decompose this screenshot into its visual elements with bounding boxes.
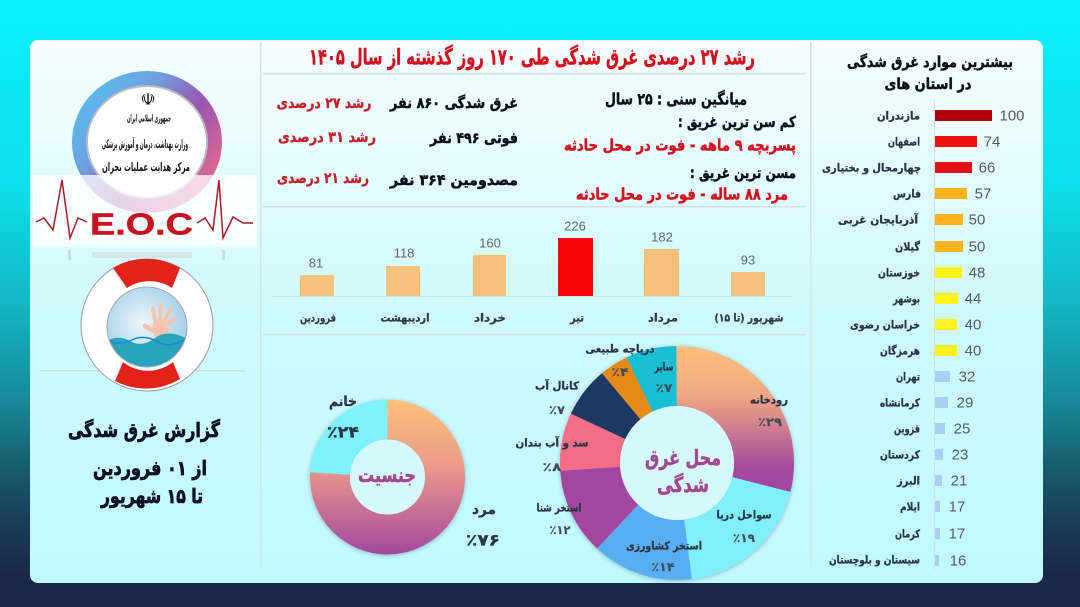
counts and growth: فوتی ۴۹۶ نفر (429, 129, 518, 147)
label: location centre: محل غرق (645, 446, 721, 470)
months (300, 312, 784, 324)
slice labels: استخر شنا (536, 502, 582, 514)
label: female (327, 394, 359, 442)
label: female: خانم (329, 394, 357, 410)
values: 182 (651, 230, 673, 244)
logo: ministry ring: مرکز هدایت عملیات بحران (102, 160, 190, 174)
label: male: مرد (472, 502, 496, 518)
province names: کرمانشاه (880, 396, 920, 410)
months: مرداد (648, 312, 678, 324)
slice labels: ٪۱۲ (550, 523, 571, 537)
province values: 25 (954, 420, 970, 438)
province names: هرمزگان (880, 344, 920, 358)
label: location centre: شدگی (657, 472, 709, 497)
province names: کردستان (880, 448, 920, 462)
province values: 40 (965, 316, 981, 334)
province values: 21 (951, 472, 967, 490)
slice labels: استخر کشاورزی (626, 540, 702, 552)
panel: provinces (822, 53, 1025, 570)
months: خرداد (474, 312, 506, 324)
age facts (564, 90, 796, 204)
logo: ministry ring: جمهوری اسلامی ایران (127, 114, 171, 124)
label: male: ٪۷۶ (466, 530, 500, 550)
bar chart: provinces (935, 110, 992, 566)
report title (68, 418, 220, 508)
label: male (466, 502, 500, 550)
values: 93 (741, 252, 755, 268)
province values: 74 (984, 134, 1000, 150)
values: 160 (479, 236, 501, 250)
values (309, 218, 755, 270)
heading: provinces: بیشترین موارد غرق شدگی (847, 53, 1013, 71)
logo: E.O.C heartbeat: E.O.C (90, 206, 193, 242)
bar chart: monthly drownings (272, 218, 792, 324)
counts and growth: رشد ۳۱ درصدی (278, 128, 376, 146)
label: gender centre: جنسیت (358, 463, 416, 487)
values: 226 (564, 218, 586, 234)
donut chart: gender (327, 394, 500, 550)
slice labels: رودخانه (750, 394, 788, 406)
province names: اصفهان (888, 136, 920, 148)
bars (300, 238, 765, 296)
logo: ministry ring: وزارت بهداشت، درمان و آموزش پزشکی (102, 136, 188, 152)
counts and growth (276, 94, 518, 189)
province values: 17 (949, 526, 965, 542)
province values: 48 (969, 264, 985, 282)
slice labels: سد و آب بندان (516, 436, 588, 450)
province values: 57 (975, 186, 991, 202)
province names (822, 110, 921, 566)
province values: 100 (999, 108, 1025, 124)
province names: گیلان (895, 240, 921, 254)
slice labels: سایر (654, 360, 674, 374)
province values: 17 (949, 498, 965, 516)
logo: ministry ring (72, 71, 222, 213)
report title: گزارش غرق شدگی (68, 418, 220, 442)
province values: 29 (957, 394, 973, 412)
counts and growth: رشد ۲۱ درصدی (277, 169, 369, 187)
months: شهریور (تا ۱۵) (714, 312, 784, 324)
slice labels: ٪۱۴ (652, 560, 674, 574)
headline: رشد ۲۷ درصدی غرق شدگی طی ۱۷۰ روز گذشته از سال ۱۴۰۵ (309, 44, 755, 70)
province names: سیستان و بلوچستان (829, 554, 920, 566)
counts and growth: غرق شدگی ۸۶۰ نفر (389, 94, 518, 112)
slice labels: دریاچه طبیعی (586, 342, 655, 356)
slice labels: ٪۷ (549, 403, 566, 417)
province names: آذربایجان غربی (838, 212, 918, 226)
province values: 23 (952, 446, 968, 464)
province values: 50 (969, 212, 985, 228)
province values: 50 (969, 238, 985, 256)
counts and growth: رشد ۲۷ درصدی (276, 94, 372, 112)
province values: 66 (979, 160, 995, 176)
icon: life ring with hand (81, 259, 213, 391)
province names: خوزستان (878, 266, 920, 280)
province names: فارس (893, 188, 921, 200)
slice labels: سواحل دریا (716, 508, 772, 522)
slice labels (516, 342, 788, 574)
age facts: پسربچه ۹ ماهه - فوت در محل حادثه (564, 136, 796, 156)
slice labels: ٪۷ (656, 381, 673, 395)
counts and growth: مصدومین ۳۶۴ نفر (389, 171, 518, 189)
months: فروردین (300, 312, 336, 324)
logo: ministry ring: ☫ (140, 90, 156, 110)
slice labels: کانال آب (535, 378, 580, 392)
values: 118 (394, 246, 414, 260)
age facts: کم سن ترین غریق : (678, 113, 796, 131)
province names: البرز (896, 474, 920, 488)
province names: چهارمحال و بختیاری (822, 162, 921, 174)
label: female: ٪۲۴ (327, 422, 359, 442)
months: اردیبهشت (380, 312, 430, 324)
panel: logos and report title (33, 71, 257, 508)
province names: قزوین (894, 422, 920, 436)
report title: از ۰۱ فروردین (93, 456, 207, 480)
age facts: مسن ترین غریق : (690, 164, 796, 182)
province values: 40 (965, 342, 981, 360)
province values: 16 (950, 552, 966, 570)
province names: خراسان رضوی (850, 318, 920, 332)
report title: تا ۱۵ شهریور (100, 484, 203, 508)
province names: ایلام (900, 500, 920, 514)
slice labels: ٪۸ (542, 460, 562, 474)
logo: E.O.C heartbeat (33, 175, 257, 260)
province names: تهران (896, 370, 920, 384)
slice labels: ٪۴ (612, 365, 628, 379)
province names: بوشهر (892, 292, 920, 306)
values: 81 (309, 256, 323, 270)
province names: کرمان (895, 528, 920, 540)
province names: مازندران (877, 110, 920, 122)
slice labels: ٪۲۹ (758, 415, 783, 429)
label: location centre (645, 446, 721, 497)
heading: provinces (847, 53, 1013, 93)
slice labels: ٪۱۹ (733, 531, 756, 545)
province values: 32 (959, 368, 975, 386)
age facts: میانگین سنی : ۲۵ سال (605, 90, 747, 108)
panel: summary figures (276, 90, 796, 204)
months: تیر (569, 312, 584, 324)
heading: provinces: در استان های (884, 75, 972, 93)
province values (949, 108, 1025, 570)
province values: 44 (965, 290, 981, 308)
donut chart: drowning location (516, 342, 788, 574)
age facts: مرد ۸۸ ساله - فوت در محل حادثه (576, 184, 788, 204)
